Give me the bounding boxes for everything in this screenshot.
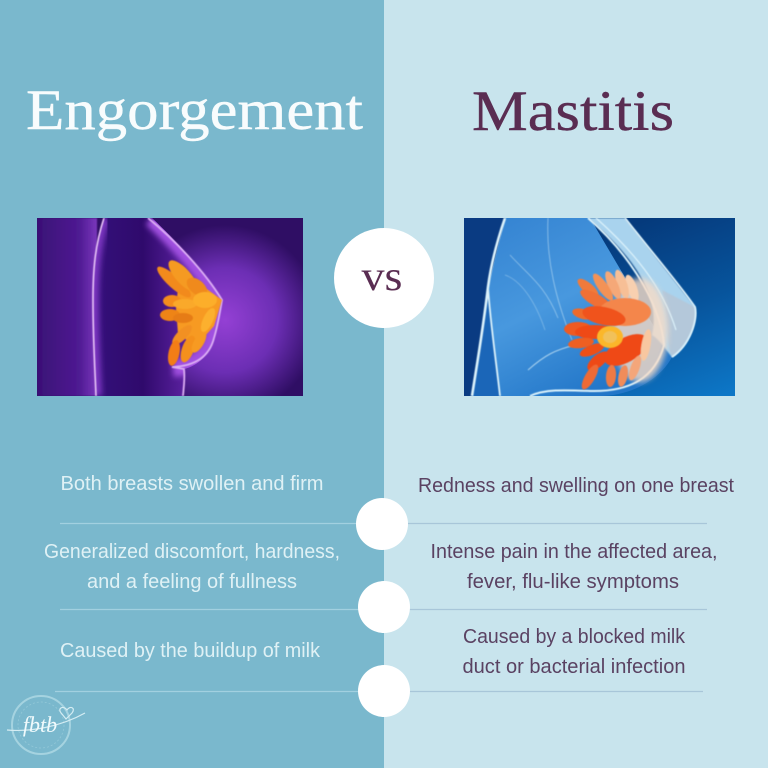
badge: VS: vs <box>362 254 402 300</box>
badge: VS <box>334 228 434 328</box>
comparison marker 2 <box>358 581 410 633</box>
title: Mastitis: Mastitis <box>472 80 674 143</box>
panel: engorgement background <box>0 0 384 768</box>
text: mastitis symptom 2 <box>430 541 718 593</box>
text: engorgement symptom 2 <box>44 541 340 593</box>
logo: fbtb <box>7 696 85 754</box>
text: mastitis cause <box>462 626 686 678</box>
text: mastitis symptom 1: Redness and swelling on one breast <box>418 475 734 497</box>
illustration: mastitis breast in blue <box>464 218 735 396</box>
divider lines <box>55 524 384 692</box>
comparison marker 1 <box>356 498 408 550</box>
orange glands <box>154 256 222 367</box>
orange petals <box>564 268 653 392</box>
text: mastitis symptom 2: Intense pain in the affected area, <box>430 541 718 563</box>
title: Engorgement: Engorgement <box>26 79 363 142</box>
text: mastitis cause: duct or bacterial infection <box>462 656 686 678</box>
text: mastitis symptom 2: fever, flu-like symptoms <box>467 571 679 593</box>
glow of mammary glands <box>612 278 668 382</box>
text: engorgement symptom 2: and a feeling of fullness <box>87 571 297 593</box>
text: mastitis cause: Caused by a blocked milk <box>463 626 686 648</box>
pectoral band and outer breast <box>588 218 696 357</box>
text: engorgement cause: Caused by the buildup of milk <box>60 640 321 662</box>
text: engorgement symptom 1: Both breasts swollen and firm <box>60 473 324 495</box>
inflamed core <box>597 326 623 348</box>
panel: mastitis background <box>384 0 768 768</box>
text: engorgement symptom 2: Generalized discomfort, hardness, <box>44 541 340 563</box>
contour lines <box>472 218 696 396</box>
logo: fbtb: fbtb <box>23 712 57 737</box>
comparison marker 3 <box>358 665 410 717</box>
illustration: engorged breast in purple <box>37 218 303 396</box>
